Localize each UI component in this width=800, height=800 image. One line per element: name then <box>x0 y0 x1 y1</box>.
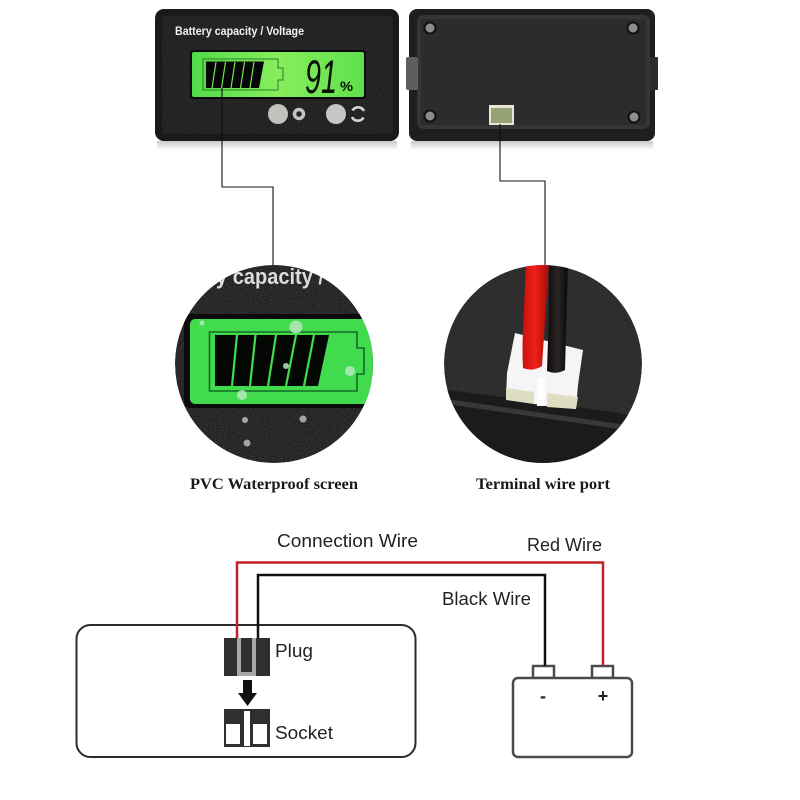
socket <box>224 709 270 747</box>
arrow: plug into socket <box>238 680 257 706</box>
leader line: port <box>500 124 545 266</box>
red wire <box>522 262 549 370</box>
label: red wire: Red Wire <box>527 535 602 555</box>
panel: meter front view <box>155 9 399 150</box>
label: terminal wire port: Terminal wire port <box>476 476 611 493</box>
label: negative terminal: - <box>540 686 546 706</box>
text: capacity crop: y capacity / <box>216 264 324 289</box>
lower housing <box>448 390 628 463</box>
label: positive terminal: + <box>598 686 608 706</box>
connector port <box>489 105 514 125</box>
button: settings <box>268 104 304 124</box>
panel: meter back view <box>406 9 658 150</box>
plug <box>224 638 270 676</box>
water droplets <box>200 320 355 446</box>
label: socket: Socket <box>275 723 333 743</box>
white connector <box>506 333 583 409</box>
label: black wire: Black Wire <box>442 589 531 609</box>
screws <box>424 22 640 124</box>
wire: black <box>258 575 545 666</box>
black wire <box>547 262 568 373</box>
battery icon <box>210 332 364 391</box>
diagram: device box <box>76 625 416 757</box>
leader line: screen <box>222 88 273 266</box>
LCD screen: % <box>340 78 354 94</box>
heading: battery capacity voltage: Battery capacity / Voltage <box>175 24 304 38</box>
label: PVC waterproof screen: PVC Waterproof screen <box>190 476 358 493</box>
panel: terminal wire port close-up <box>444 265 642 463</box>
label: plug: Plug <box>275 641 313 661</box>
panel: waterproof screen close-up <box>175 264 384 463</box>
label: connection wire: Connection Wire <box>277 531 418 551</box>
button: refresh <box>326 104 364 124</box>
reading: 91 percent: 91 <box>305 50 337 103</box>
LCD screen <box>190 50 366 103</box>
wire: red <box>237 562 603 666</box>
diagram: battery <box>513 666 632 757</box>
